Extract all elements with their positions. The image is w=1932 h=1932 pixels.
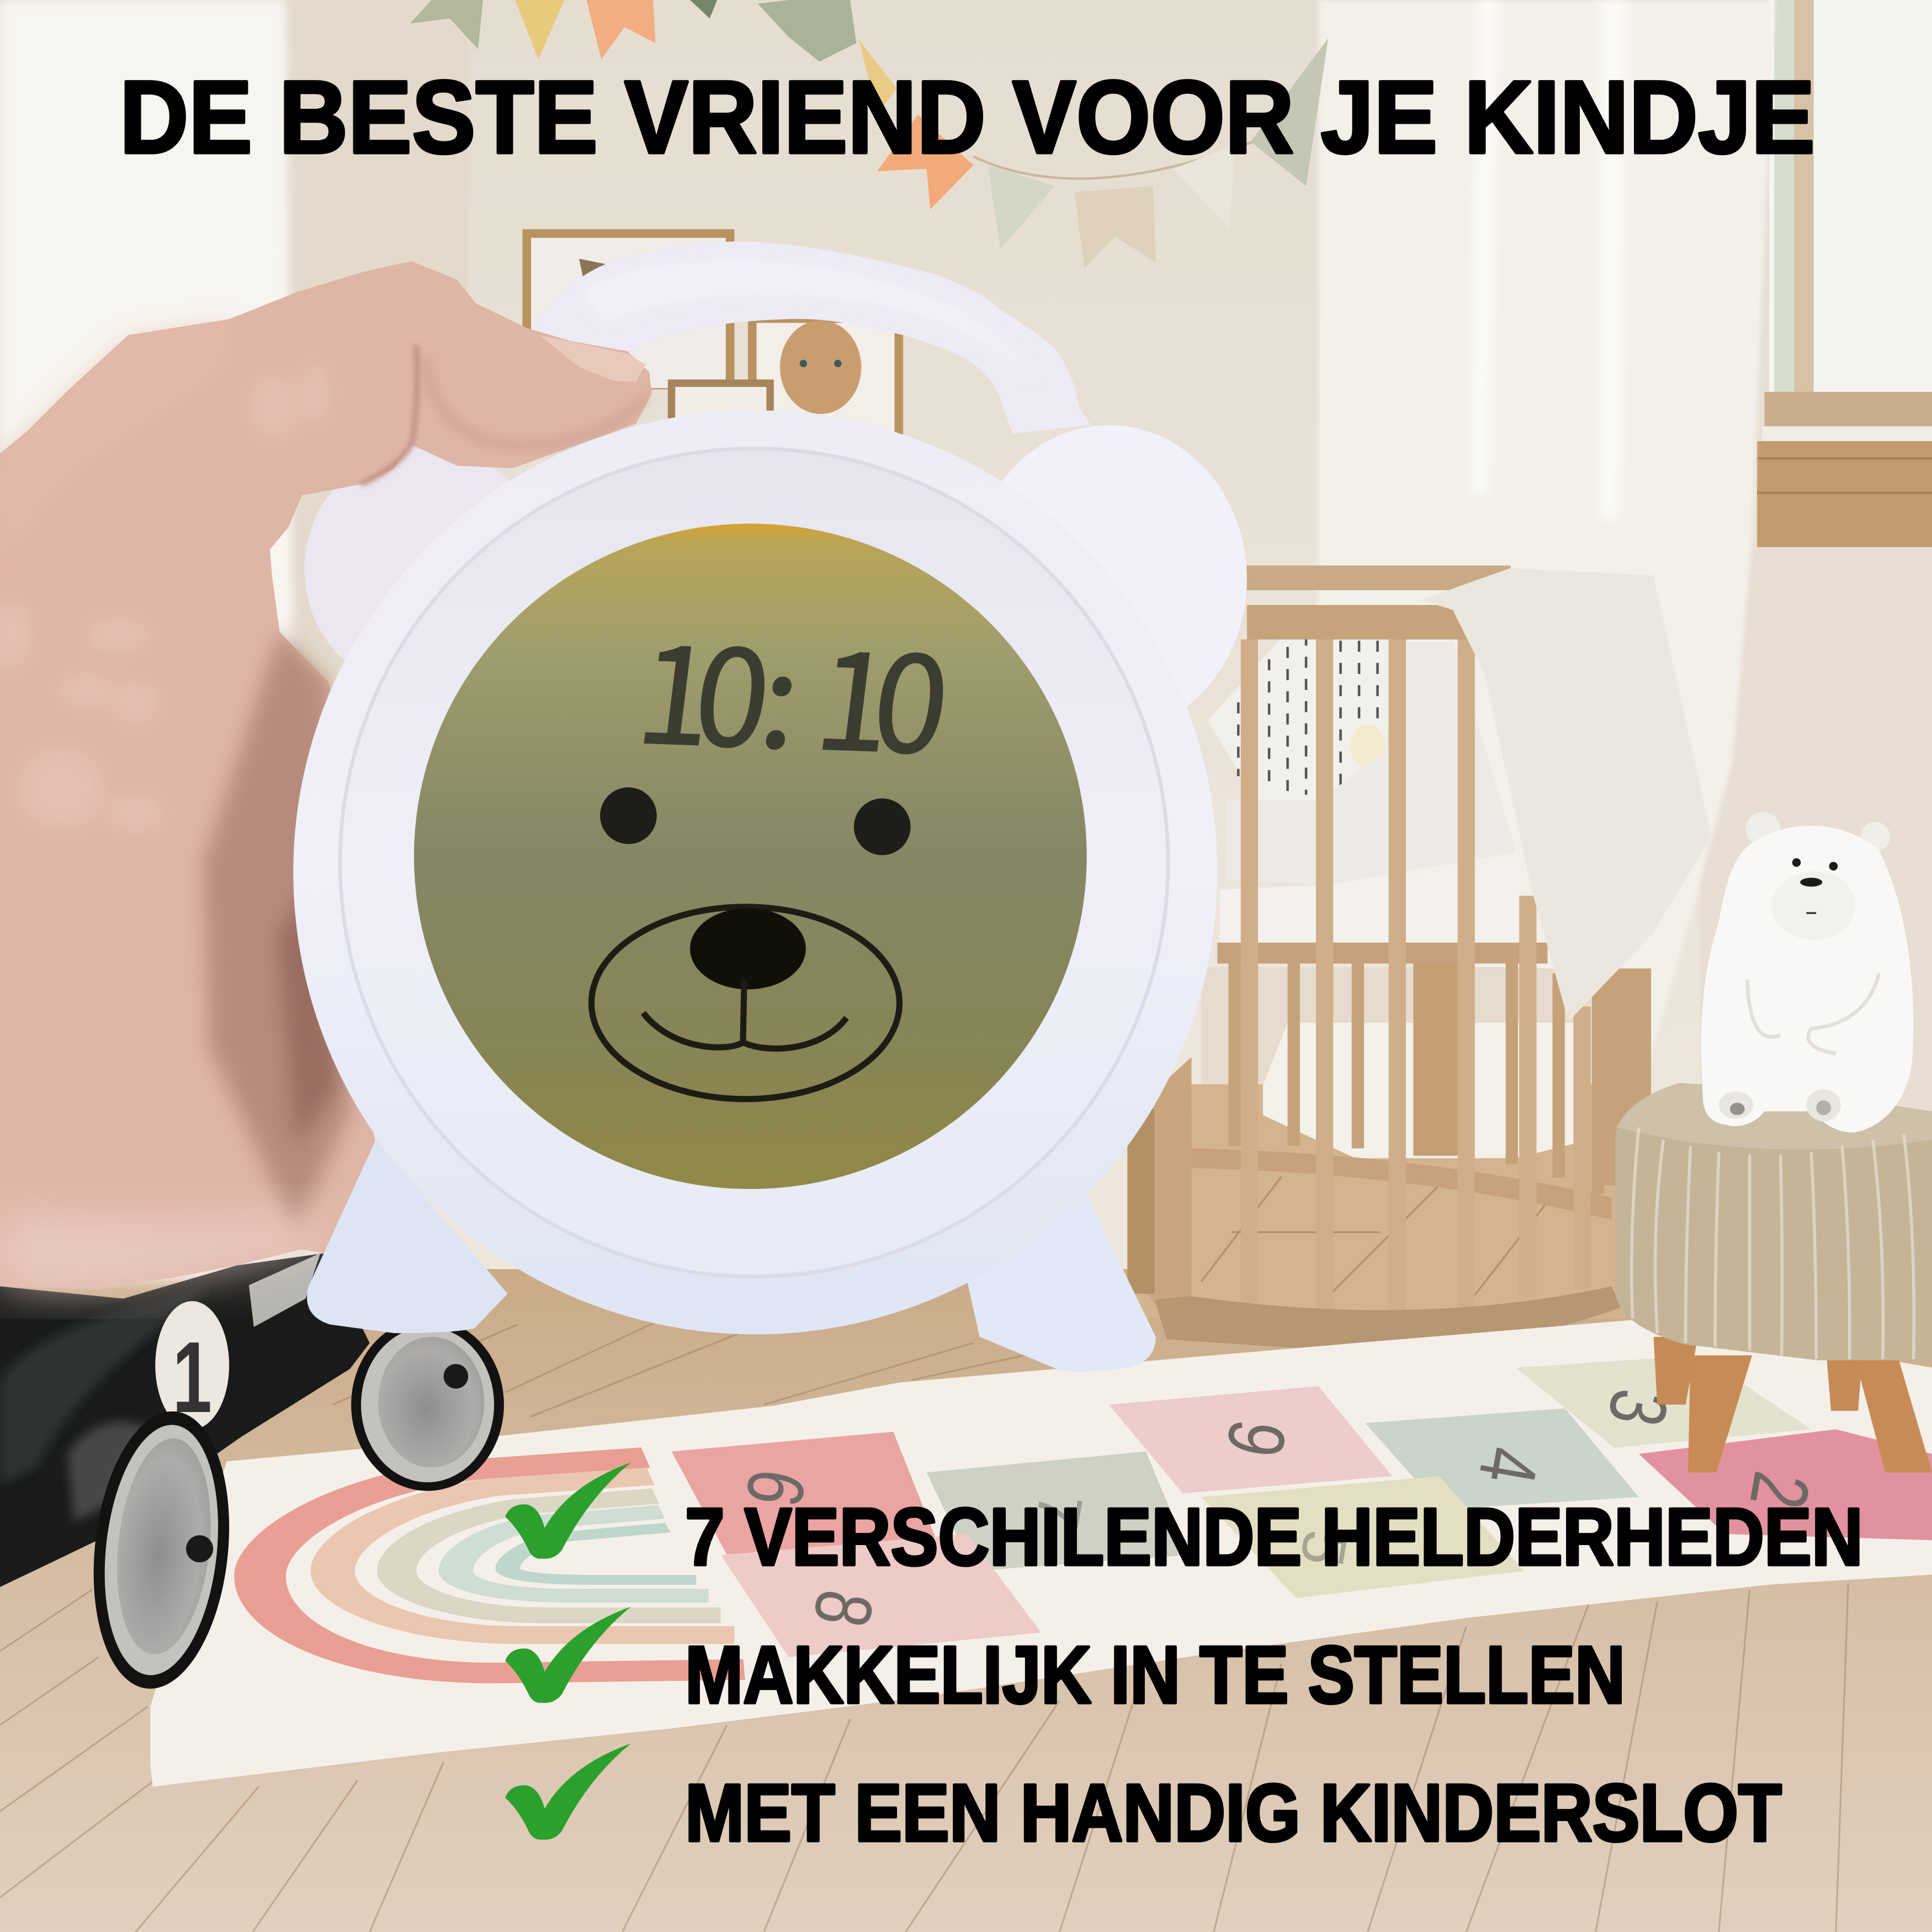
pale lower hand bbox=[0, 1214, 323, 1289]
crib bbox=[1127, 566, 1651, 1349]
toy car: 1 bbox=[172, 1320, 212, 1434]
crib floor planks bbox=[1201, 1177, 1552, 1306]
feature text 2: MAKKELIJK IN TE STELLEN bbox=[685, 1630, 1625, 1721]
crib top rail bbox=[1247, 605, 1469, 639]
floor planks bbox=[0, 1294, 1848, 1932]
bedding bbox=[1208, 592, 1417, 801]
check mark 2 bbox=[505, 1607, 631, 1703]
crib lower background bbox=[1201, 967, 1651, 1084]
crib corner post bbox=[1127, 1057, 1191, 1304]
hand holding clock bbox=[0, 261, 652, 1289]
rug digits: 8 bbox=[797, 1584, 890, 1633]
car number badge bbox=[155, 1301, 229, 1429]
stool bbox=[1615, 1083, 1932, 1472]
crib back rim bbox=[1244, 566, 1511, 590]
window and right curtain bbox=[1318, 0, 1932, 1084]
bunting garland bbox=[410, 0, 1328, 269]
thumb nail bbox=[540, 335, 646, 382]
wall pictures bbox=[522, 229, 903, 436]
crib mattress rail bbox=[1217, 943, 1548, 964]
clock feet bbox=[307, 1140, 508, 1333]
clock left ear bbox=[304, 446, 546, 692]
rug digits: 4 bbox=[1462, 1441, 1556, 1490]
crib thin slats bbox=[1235, 959, 1598, 1194]
plush polar bear bbox=[1701, 812, 1913, 1132]
rug digits: 6 bbox=[729, 1463, 822, 1512]
rug digits: 7 bbox=[1022, 1489, 1096, 1535]
thumb crease bbox=[361, 345, 417, 484]
feature text 3: MET EEN HANDIG KINDERSLOT bbox=[685, 1768, 1782, 1859]
lcd screen bbox=[414, 524, 1087, 1189]
check mark 1 bbox=[505, 1463, 631, 1559]
blanket bbox=[1421, 568, 1711, 1021]
clock body bbox=[293, 410, 1217, 1334]
toy car bbox=[0, 1253, 504, 1695]
bear face bbox=[591, 787, 911, 1099]
check mark 3 bbox=[505, 1743, 631, 1840]
rug digits: 5 bbox=[1287, 1526, 1361, 1572]
clock right ear bbox=[971, 425, 1247, 733]
rug digits bbox=[729, 1383, 1827, 1633]
rug digits: 2 bbox=[1733, 1466, 1827, 1515]
rug digits: 9 bbox=[1209, 1414, 1303, 1463]
rug digits: 3 bbox=[1591, 1383, 1685, 1432]
rainbow bbox=[260, 1458, 744, 1673]
rear wheel bbox=[351, 1318, 504, 1491]
clock bbox=[293, 410, 1247, 1372]
front wheel bbox=[81, 1405, 242, 1695]
clock handle bbox=[530, 242, 1090, 434]
crib thick slats bbox=[1249, 639, 1582, 1311]
left curtain bbox=[0, 0, 293, 1281]
hopscotch rug bbox=[150, 1318, 1932, 1787]
digital time: 10:10 bbox=[628, 589, 961, 792]
skin highlights bbox=[0, 362, 329, 833]
crib bottom ring bbox=[1155, 1286, 1622, 1349]
crib back base ring bbox=[1191, 1148, 1612, 1220]
title: DE BESTE VRIEND VOOR JE KINDJE bbox=[120, 59, 1815, 175]
wrist shading bbox=[0, 319, 229, 554]
palm shadow bbox=[203, 632, 351, 1232]
